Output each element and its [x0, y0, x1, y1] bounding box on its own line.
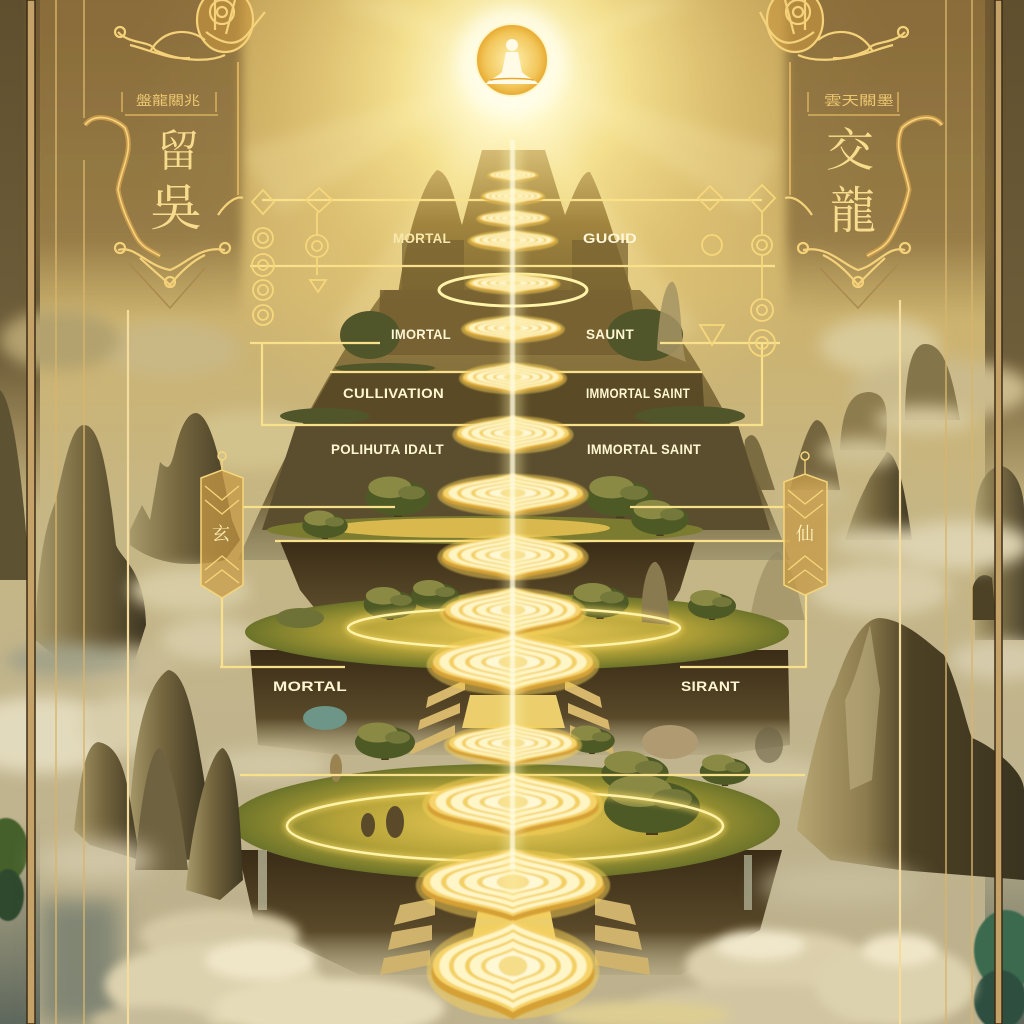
clouds under island two — [210, 749, 825, 793]
foliage on tiers — [280, 309, 745, 426]
large glyph two: 龍 — [830, 183, 876, 239]
large glyph one: 交 — [826, 125, 874, 176]
icon column: left symbols — [252, 188, 332, 325]
stage label: Polihuta Idalt: POLIHUTA IDALT — [331, 441, 444, 457]
ring on upper tier — [439, 274, 587, 306]
stage label: Mortal lower: MORTAL — [273, 678, 347, 694]
shield point — [128, 262, 205, 308]
caption box — [808, 92, 900, 115]
ornament: left phoenix — [115, 0, 265, 287]
island three — [230, 722, 782, 975]
large glyph two: 吳 — [150, 180, 202, 236]
large glyph one: 留 — [157, 127, 199, 176]
caption box — [122, 92, 218, 115]
sun glow — [0, 0, 1024, 520]
badge: right — [784, 452, 827, 595]
stage label: Cultivation: CULLIVATION — [343, 385, 444, 401]
plaque frame — [237, 62, 239, 195]
horizontal guide lines — [220, 200, 807, 775]
central stair discs — [416, 169, 610, 1019]
meditating figure medallion — [457, 7, 567, 117]
badge: left — [201, 452, 243, 598]
island one — [267, 476, 703, 640]
stage label: Immortal: IMORTAL — [391, 326, 451, 342]
ring on island three — [287, 791, 723, 861]
glowing rings on islands — [287, 274, 723, 861]
knot border — [85, 118, 160, 256]
icon column: right symbols — [698, 185, 775, 356]
stage label: Immortal Saint upper: IMMORTAL SAINT — [586, 385, 690, 401]
left foreground peaks — [74, 670, 243, 900]
badge: right: 仙 — [796, 524, 814, 544]
panel shading left — [30, 0, 242, 320]
stage label: Immortal Saint lower: IMMORTAL SAINT — [587, 441, 701, 457]
small caption: 雲天關墨 — [824, 93, 894, 108]
distant mountains — [0, 344, 1024, 660]
panel shading right — [786, 0, 994, 320]
tier two — [303, 372, 705, 425]
stage label: Saint: SAUNT — [586, 326, 634, 342]
foreground clouds — [90, 909, 975, 1024]
tier three — [262, 425, 770, 530]
stage label: Sirant: SIRANT — [681, 678, 740, 694]
ornament: right phoenix — [760, 0, 910, 287]
knot border — [867, 118, 942, 256]
upper peaks — [398, 150, 635, 300]
knot highlight — [85, 118, 160, 256]
corner trees — [0, 818, 1024, 1024]
panel: left title plaque — [85, 62, 238, 308]
mountain body — [238, 290, 790, 560]
mid clouds — [0, 406, 1024, 773]
central light beam — [504, 140, 522, 900]
badge: left: 玄 — [212, 524, 230, 544]
blue-green stone — [303, 706, 347, 730]
light rays — [240, 0, 780, 360]
stage label: Mortal: MORTAL — [393, 230, 451, 246]
distant clouds — [0, 310, 1024, 470]
island two — [245, 562, 790, 755]
central mountain — [238, 150, 790, 560]
shield point — [820, 262, 900, 308]
steps between two and three — [410, 680, 614, 755]
lower haze — [35, 842, 920, 1024]
plaque frame — [789, 62, 791, 195]
ring on island two — [348, 608, 680, 648]
knot highlight — [867, 118, 942, 256]
tier one — [378, 290, 640, 355]
pillars — [402, 240, 628, 295]
panel: right title plaque — [790, 62, 942, 308]
small caption: 盤龍關兆 — [136, 93, 200, 108]
right foreground peak — [755, 618, 1024, 880]
stage label: Guoid: GUOID — [583, 230, 637, 246]
